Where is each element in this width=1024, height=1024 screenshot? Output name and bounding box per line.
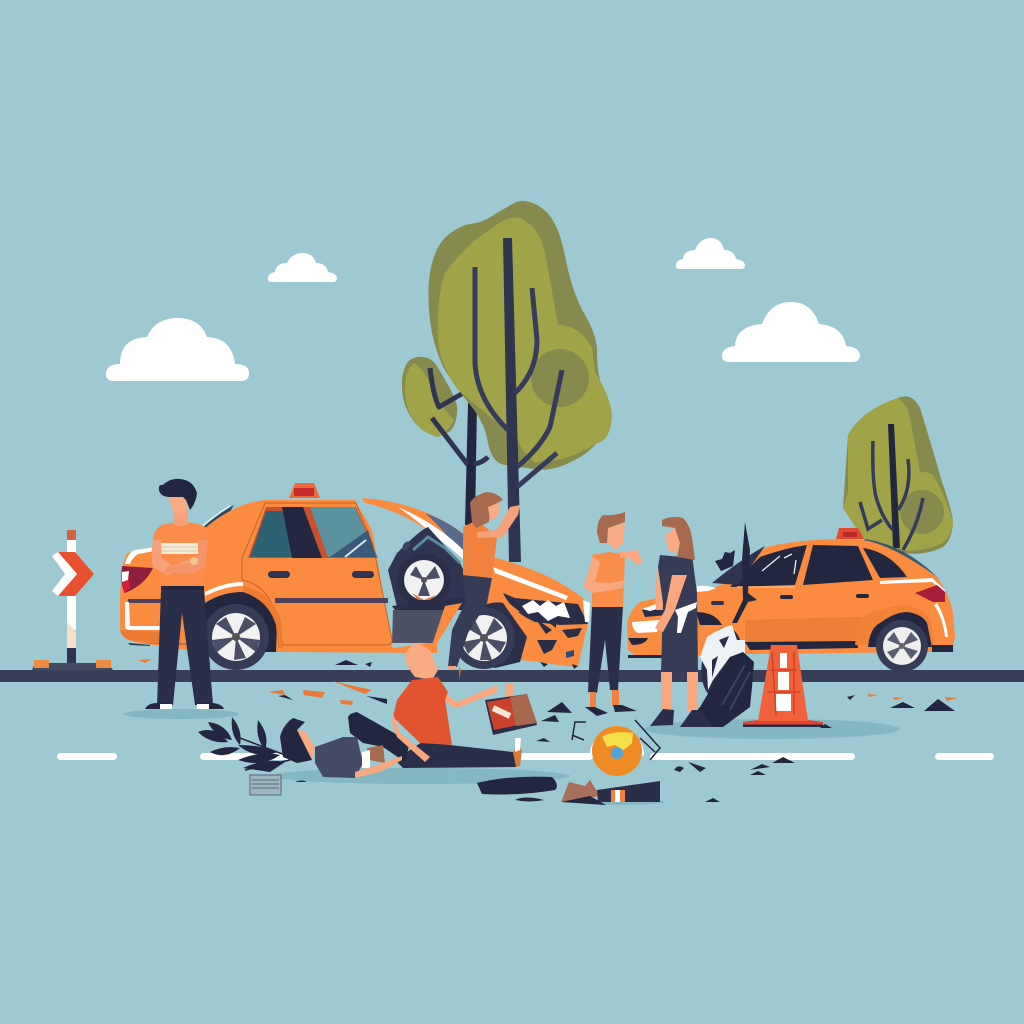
standing man left xyxy=(145,479,224,709)
crash damage xyxy=(498,593,590,669)
arm xyxy=(477,505,520,538)
shirt xyxy=(592,552,625,607)
arm reaching xyxy=(444,685,498,707)
right orange car xyxy=(627,528,955,672)
woman at tree xyxy=(448,492,520,680)
dropped book xyxy=(485,694,537,735)
body lower shade xyxy=(745,616,885,645)
cloud 1 xyxy=(106,318,249,381)
dark roof rear edge xyxy=(860,539,938,578)
car body rear xyxy=(120,500,393,652)
neck xyxy=(173,510,188,526)
door trim xyxy=(275,598,388,603)
hair xyxy=(662,517,695,560)
door and frame xyxy=(242,503,392,645)
arms xyxy=(583,556,625,593)
face xyxy=(168,494,187,513)
rear wheel xyxy=(876,620,928,672)
woman in navy dress xyxy=(650,517,713,727)
arm xyxy=(355,756,402,778)
warning circle icon xyxy=(590,720,660,776)
papers xyxy=(161,543,198,554)
boots xyxy=(650,709,674,726)
windows xyxy=(248,507,378,558)
engine bay wheel xyxy=(397,553,451,607)
shirt xyxy=(393,677,452,745)
belt xyxy=(161,586,204,592)
door handles xyxy=(268,571,290,578)
legs xyxy=(157,590,213,705)
dress xyxy=(658,555,698,672)
left orange car xyxy=(120,483,590,670)
engine bay xyxy=(388,527,472,607)
hair xyxy=(470,492,503,528)
man in orange shirt standing xyxy=(583,512,643,716)
arm xyxy=(655,575,687,632)
cloud 3 xyxy=(676,238,745,269)
foot xyxy=(513,745,522,767)
rear window strip xyxy=(198,505,234,532)
roof light xyxy=(289,483,320,498)
wheel arch rear xyxy=(205,592,277,652)
foot behind book xyxy=(505,683,513,697)
road edge line xyxy=(0,670,1024,682)
head xyxy=(405,643,438,680)
back arm xyxy=(655,567,665,610)
hair xyxy=(159,479,197,510)
tail light xyxy=(915,585,945,602)
legs xyxy=(448,575,492,667)
broken car part with stripe xyxy=(561,780,660,805)
car body xyxy=(627,539,955,657)
windows xyxy=(730,545,807,587)
broken post and wrecked front wheel xyxy=(680,522,757,727)
rear wheel xyxy=(203,604,269,670)
shoes xyxy=(145,703,172,709)
legs xyxy=(661,670,672,712)
leafy branch xyxy=(198,717,290,772)
crossed arms xyxy=(152,540,195,575)
small tree behind left car xyxy=(402,357,488,525)
rear white stripes xyxy=(125,547,155,564)
road dashes xyxy=(57,753,994,760)
head xyxy=(665,528,680,553)
shirt xyxy=(153,522,208,586)
face xyxy=(488,502,500,520)
road debris xyxy=(278,660,955,802)
front arch xyxy=(696,612,722,625)
hood white stripe xyxy=(493,567,568,600)
apron sash xyxy=(675,602,697,633)
extended leg xyxy=(395,742,517,768)
face xyxy=(297,730,315,760)
lower door panel xyxy=(392,610,453,643)
front fender xyxy=(470,555,588,667)
raised leg xyxy=(348,712,410,762)
body sill xyxy=(745,641,858,650)
door handles xyxy=(780,595,793,599)
tail light xyxy=(121,566,153,593)
shoes xyxy=(585,707,608,716)
headlight xyxy=(632,620,660,633)
open hood xyxy=(362,498,470,565)
shirt xyxy=(463,520,497,578)
torso xyxy=(315,737,363,778)
ground shadows xyxy=(123,709,900,805)
traffic cone xyxy=(743,645,823,727)
cloud 4 xyxy=(722,302,860,362)
roof light xyxy=(836,528,864,539)
head xyxy=(608,523,625,550)
hair xyxy=(280,718,312,763)
supporting arm xyxy=(392,713,430,762)
cloud 2 xyxy=(268,253,337,282)
wheel arch xyxy=(855,605,935,647)
front wheel arch xyxy=(452,602,527,668)
orange debris xyxy=(138,659,958,705)
big tree xyxy=(428,201,612,562)
hair xyxy=(597,512,625,543)
sill xyxy=(276,642,437,653)
right tree xyxy=(843,396,953,554)
shorts xyxy=(367,745,385,763)
sitting man in red shirt xyxy=(348,643,522,768)
small radio box xyxy=(250,775,281,795)
front wheel xyxy=(453,607,515,669)
lying man xyxy=(280,718,402,778)
white trim xyxy=(880,578,945,592)
road sign xyxy=(32,530,113,670)
legs xyxy=(588,606,623,693)
